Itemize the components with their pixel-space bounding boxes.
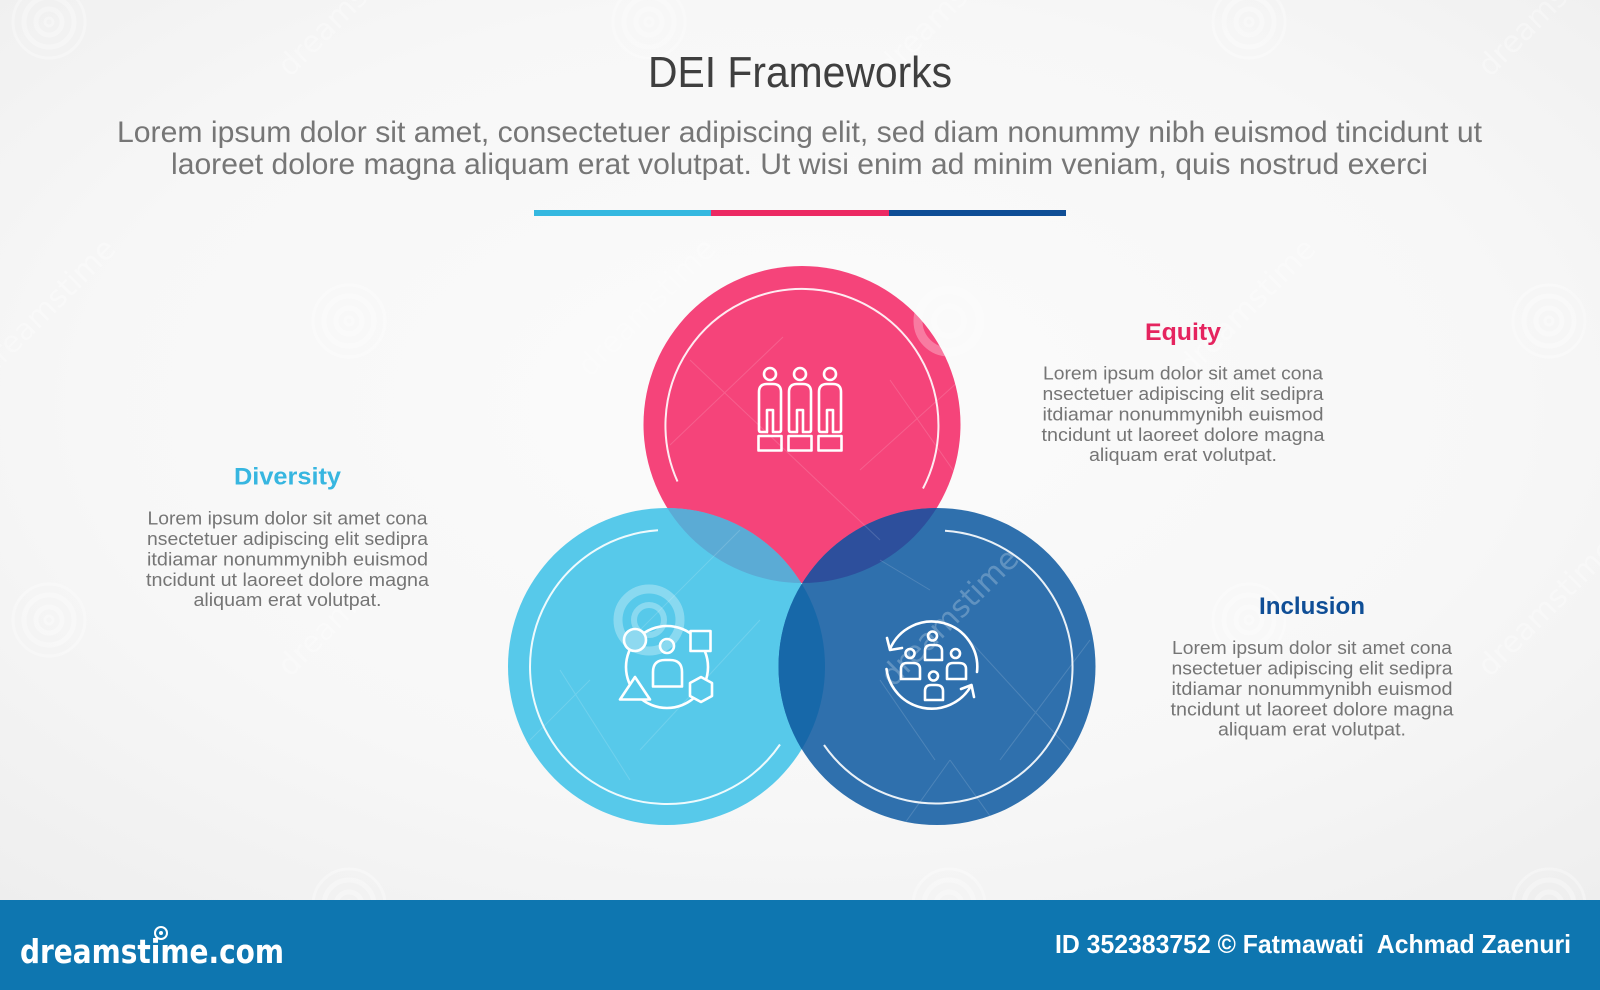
venn diagram [508,266,1096,830]
subtitle text: Lorem ipsum dolor sit amet, consectetuer adipiscing elit, sed diam nonummy nibh euismod tincidunt ut [117,116,1483,149]
description: equity: aliquam erat volutpat. [1089,445,1277,465]
description: equity: nsectetuer adipiscing elit sedipra [1042,384,1325,404]
overlap: equity and diversity [668,508,802,583]
text block: equity [1042,319,1326,465]
description: inclusion [1170,638,1455,740]
description: diversity: Lorem ipsum dolor sit amet cona [148,508,429,528]
title: DEI Frameworks [648,48,952,97]
description: equity: Lorem ipsum dolor sit amet cona [1043,364,1324,384]
inner arc: diversity [530,530,780,804]
inner arc: equity [665,289,938,488]
description: equity [1042,364,1326,465]
text: dreamstime [571,231,723,384]
tricolor divider [534,210,1066,216]
description: inclusion: tncidunt ut laoreet dolore magna [1170,700,1455,720]
subtitle text [117,116,1483,181]
description: equity: itdiamar nonummynibh euismod [1042,404,1324,424]
spiral watermarks over circles: dreamstime [874,541,1026,694]
text: dreamstime [271,531,423,684]
description: inclusion: nsectetuer adipiscing elit sedipra [1172,658,1454,678]
icon: three people on pedestals [758,368,842,450]
footer bar [0,900,1600,990]
icon: people in rotating circle [886,622,977,709]
footer logo: dreamstime.com [20,932,284,971]
heading: diversity: Diversity [234,464,342,490]
description: diversity: nsectetuer adipiscing elit sedipra [147,529,429,549]
inner arc: inclusion [824,531,1073,804]
text: dreamstime [1171,231,1323,384]
circle: diversity [508,508,825,825]
description: inclusion: aliquam erat volutpat. [1218,720,1406,740]
spiral watermarks over circles [618,290,1026,694]
description: diversity: tncidunt ut laoreet dolore magna [146,570,430,590]
heading: equity: Equity [1145,319,1222,346]
heading: inclusion: Inclusion [1259,593,1365,620]
description: diversity: aliquam erat volutpat. [194,590,382,610]
overlap: diversity and inclusion [778,584,825,750]
subtitle text: laoreet dolore magna aliquam erat volutpat. Ut wisi enim ad minim veniam, quis nostrud exerci [171,148,1428,181]
text block: diversity [146,464,430,610]
description: diversity: itdiamar nonummynibh euismod [147,550,428,570]
circle: equity [644,266,960,583]
text block: inclusion [1170,593,1455,740]
overlap: equity and inclusion [802,508,936,583]
description: diversity [146,508,430,610]
description: inclusion: Lorem ipsum dolor sit amet cona [1172,638,1453,658]
footer credit: ID 352383752 © Fatmawati Achmad Zaenuri [1055,929,1571,959]
icon: person among different shapes [620,626,712,708]
description: inclusion: itdiamar nonummynibh euismod [1172,679,1452,699]
description: equity: tncidunt ut laoreet dolore magna [1042,425,1326,445]
circle: inclusion [778,508,1096,825]
